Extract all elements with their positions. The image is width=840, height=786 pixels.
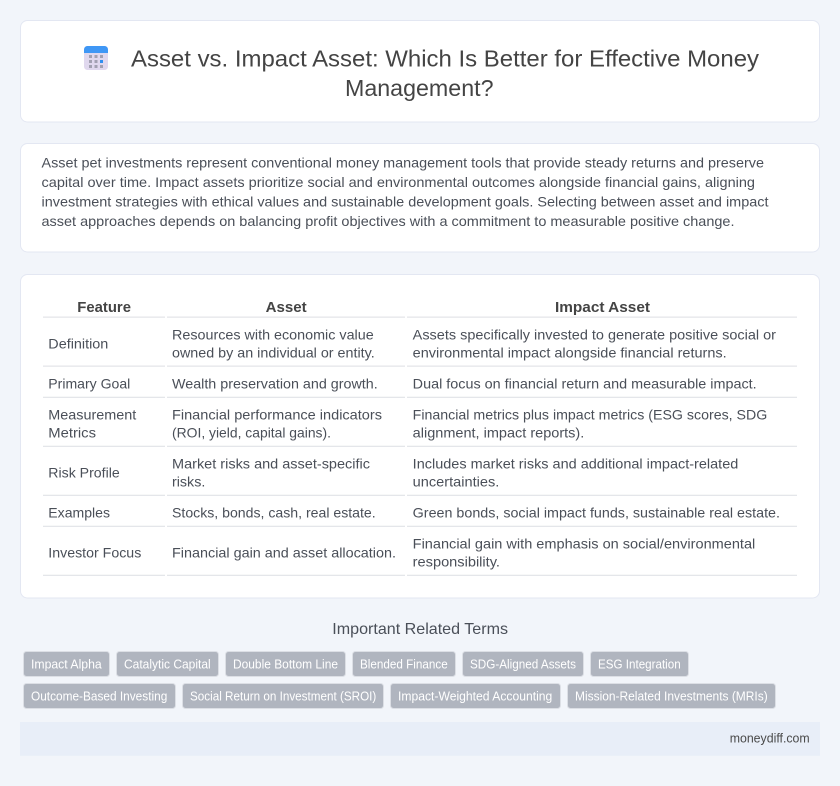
chip: catalytic capital: Catalytic Capital (124, 657, 211, 671)
row: risk profile (48, 455, 738, 489)
table header row: Feature (77, 300, 131, 316)
row: risk profile: Risk Profile (48, 464, 120, 480)
table header row: Asset (266, 300, 307, 316)
chip: impact alpha (24, 652, 110, 676)
chip: social return on investment: Social Return on Investment (SROI) (190, 689, 376, 703)
title: Asset vs. Impact Asset: Which Is Better for Effective Money (131, 46, 759, 72)
row: measurement metrics: Measurement (48, 406, 136, 422)
table grid lines (43, 316, 797, 576)
chip: outcome-based investing: Outcome-Based Investing (31, 689, 167, 703)
chip: mission-related investments: Mission-Related Investments (MRIs) (575, 689, 768, 703)
row: examples: Examples (48, 504, 110, 520)
footer (20, 722, 820, 756)
row: primary goal: Wealth preservation and growth. (172, 375, 378, 391)
table header row: Impact Asset (555, 300, 650, 316)
chip: impact-weighted accounting (390, 684, 560, 708)
chip: double bottom line: Double Bottom Line (233, 657, 338, 671)
icon: calendar (84, 46, 108, 70)
chip: double bottom line (226, 652, 346, 676)
title: Management? (345, 75, 494, 101)
panel: comparison table (20, 274, 820, 598)
chip: blended finance: Blended Finance (360, 657, 448, 671)
chip: blended finance (352, 652, 456, 676)
row: examples (48, 504, 780, 520)
row: primary goal (48, 375, 757, 391)
row: definition: Assets specifically invested to generate positive social or (413, 326, 776, 342)
row: investor focus (48, 535, 755, 569)
row: risk profile: Includes market risks and additional impact-related (413, 455, 738, 471)
row: examples: Stocks, bonds, cash, real estate. (172, 504, 376, 520)
row: measurement metrics: Metrics (48, 424, 96, 440)
chip: impact alpha: Impact Alpha (31, 657, 102, 671)
row: definition: Definition (48, 335, 108, 351)
chip: sdg-aligned assets: SDG-Aligned Assets (470, 657, 576, 671)
row: investor focus: Financial gain and asset allocation. (172, 544, 396, 560)
row: measurement metrics: Financial metrics plus impact metrics (ESG scores, SDG (413, 406, 767, 422)
row: investor focus: Investor Focus (48, 544, 141, 560)
panel: description (20, 144, 820, 252)
heading: important related terms: Important Related Terms (332, 621, 508, 638)
title (131, 46, 759, 101)
row: definition (48, 326, 776, 360)
description text: investment strategies with ethical values and sustainable development goals. Selecting between asset and impact (42, 194, 769, 210)
row: measurement metrics: Financial performance indicators (172, 406, 382, 422)
chip: impact-weighted accounting: Impact-Weighted Accounting (398, 689, 552, 703)
row: primary goal: Primary Goal (48, 375, 130, 391)
panel: title header (20, 20, 820, 122)
description text: capital over time. Impact assets prioritize social and environmental outcomes alongside financial gains, aligning (42, 174, 755, 190)
chip: catalytic capital (116, 652, 218, 676)
chip: mission-related investments (568, 684, 776, 708)
chip: outcome-based investing (24, 684, 176, 708)
row: investor focus: responsibility. (413, 553, 500, 569)
row: primary goal: Dual focus on financial return and measurable impact. (413, 375, 757, 391)
row: definition: Resources with economic value (172, 326, 374, 342)
chip: esg integration (590, 652, 688, 676)
chip: social return on investment (182, 684, 384, 708)
related term chips (24, 652, 776, 708)
row: measurement metrics (48, 406, 767, 440)
row: measurement metrics: (ROI, yield, capital gains). (172, 424, 331, 440)
row: risk profile: Market risks and asset-specific (172, 455, 370, 471)
row: risk profile: uncertainties. (413, 473, 499, 489)
table header row (77, 300, 650, 316)
footer site name: moneydiff.com (730, 732, 810, 746)
description text: Asset pet investments represent conventional money management tools that provide steady returns and preserve (42, 154, 764, 170)
description text (42, 154, 769, 229)
row: definition: environmental impact alongside financial returns. (413, 344, 727, 360)
row: risk profile: risks. (172, 473, 205, 489)
description text: asset approaches depends on balancing profit objectives with a commitment to measurable positive change. (42, 213, 734, 229)
chip: sdg-aligned assets (462, 652, 584, 676)
chip: esg integration: ESG Integration (598, 657, 681, 671)
row: examples: Green bonds, social impact funds, sustainable real estate. (413, 504, 780, 520)
row: investor focus: Financial gain with emphasis on social/environmental (413, 535, 755, 551)
row: definition: owned by an individual or entity. (172, 344, 375, 360)
row: measurement metrics: alignment, impact reports). (413, 424, 584, 440)
